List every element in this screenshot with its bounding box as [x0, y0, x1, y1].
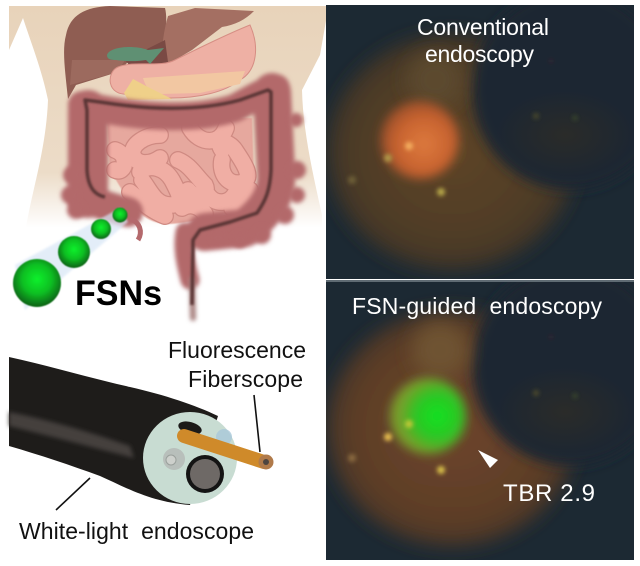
panel: FSN-guided endoscopy — [326, 266, 640, 560]
light beam — [15, 208, 128, 310]
green tumor signal — [390, 378, 466, 454]
lumen — [466, 34, 596, 196]
leader line: fiberscope — [254, 395, 260, 452]
tumor — [381, 101, 459, 179]
lens — [186, 455, 224, 493]
pancreas — [143, 71, 245, 94]
panel title: Conventional — [417, 14, 549, 40]
crescent glow — [412, 322, 468, 378]
TBR value: TBR 2.9 — [503, 480, 595, 507]
liver — [64, 6, 254, 99]
label: Fluorescence Fiberscope: Fluorescence — [168, 337, 306, 363]
FSNs label: FSNs — [75, 274, 162, 313]
panel: conventional endoscopy — [326, 0, 640, 280]
illumination — [327, 310, 577, 546]
label: White-light endoscope: White-light endoscope — [19, 518, 254, 544]
sheen band — [9, 412, 134, 458]
small intestine — [107, 118, 254, 224]
panel: endoscope photo — [9, 337, 306, 544]
label: Fluorescence Fiberscope: Fiberscope — [188, 366, 303, 392]
fiber — [184, 436, 264, 462]
label: Fluorescence Fiberscope — [168, 337, 306, 392]
colon — [61, 88, 306, 318]
arrowhead — [478, 450, 498, 468]
FSN particles — [13, 208, 128, 307]
panel: anatomy illustration — [9, 6, 327, 318]
leader line: endoscope — [56, 478, 90, 510]
gallbladder — [107, 47, 164, 64]
illumination — [327, 34, 577, 270]
panel title: endoscopy — [425, 41, 534, 67]
crescent glow — [410, 50, 459, 97]
panel title — [417, 14, 549, 67]
duodenum yellow — [124, 79, 172, 100]
stomach — [110, 25, 256, 98]
highlights — [348, 60, 578, 196]
panel title: FSN-guided endoscopy — [352, 293, 602, 319]
LED — [163, 448, 185, 470]
torso skin — [9, 6, 327, 228]
scope body — [9, 357, 218, 505]
scope face — [143, 412, 237, 504]
lumen — [465, 309, 596, 472]
divider — [326, 280, 634, 282]
highlights — [348, 336, 578, 474]
